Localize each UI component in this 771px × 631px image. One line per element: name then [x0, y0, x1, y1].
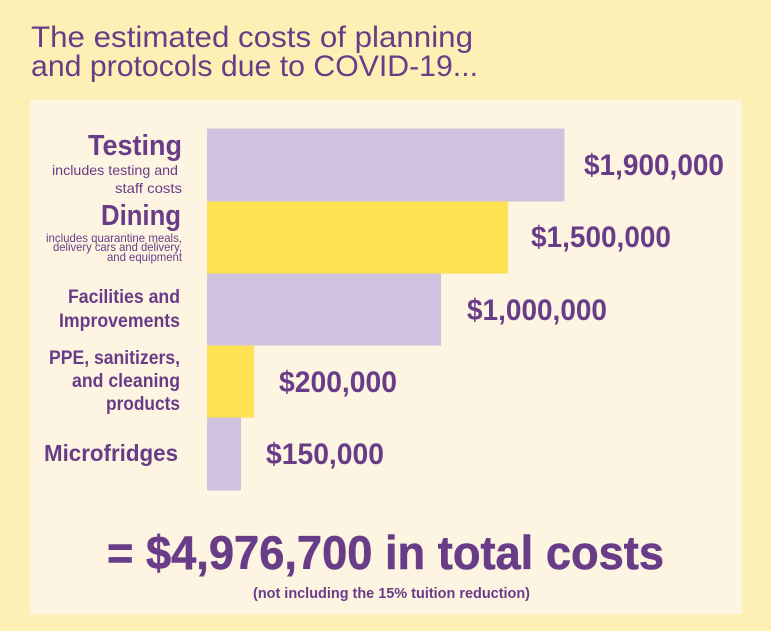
panel: cost chart: [30, 100, 742, 614]
label: testing: includes testing and: [52, 162, 178, 178]
label: testing: Testing: [88, 130, 182, 162]
title: The estimated costs of planning: [31, 21, 473, 54]
label: PPE, sanitizers, and cleaning products: PPE, sanitizers,: [49, 348, 180, 369]
label: facilities and improvements: Facilities and: [68, 287, 180, 308]
label: facilities and improvements: [59, 287, 180, 332]
label: testing: staff costs: [115, 180, 182, 196]
label: PPE, sanitizers, and cleaning products: [49, 348, 180, 415]
value: facilities and improvements: $1,000,000: [467, 294, 607, 327]
label: dining: Dining: [101, 200, 181, 232]
total costs: = $4,976,700 in total costs: [107, 526, 664, 579]
label: PPE, sanitizers, and cleaning products: and cleaning: [72, 371, 180, 392]
bar: facilities and improvements: [207, 274, 441, 346]
value: PPE, sanitizers, and cleaning products: $200,000: [279, 366, 397, 399]
bar: PPE, sanitizers, and cleaning products: [207, 346, 254, 418]
label: dining: delivery cars and delivery,: [53, 240, 182, 254]
label: dining: and equipment: [107, 250, 183, 264]
bar: microfridges: [207, 418, 241, 490]
label: PPE, sanitizers, and cleaning products: products: [106, 394, 180, 415]
footnote: (not including the 15% tuition reduction): [253, 585, 530, 602]
value: dining: $1,500,000: [531, 221, 671, 254]
value: testing: $1,900,000: [584, 149, 724, 182]
bar chart: [207, 128, 564, 490]
label: dining: includes quarantine meals,: [46, 231, 182, 245]
value: microfridges: $150,000: [266, 438, 384, 471]
label: dining: [46, 200, 183, 264]
bar: dining: [207, 202, 508, 274]
label: testing: [52, 130, 182, 196]
bar: testing: [207, 128, 564, 202]
label: microfridges: Microfridges: [44, 440, 178, 466]
label: facilities and improvements: Improvements: [59, 311, 180, 332]
title: [31, 21, 478, 83]
title: and protocols due to COVID-19...: [31, 50, 478, 83]
